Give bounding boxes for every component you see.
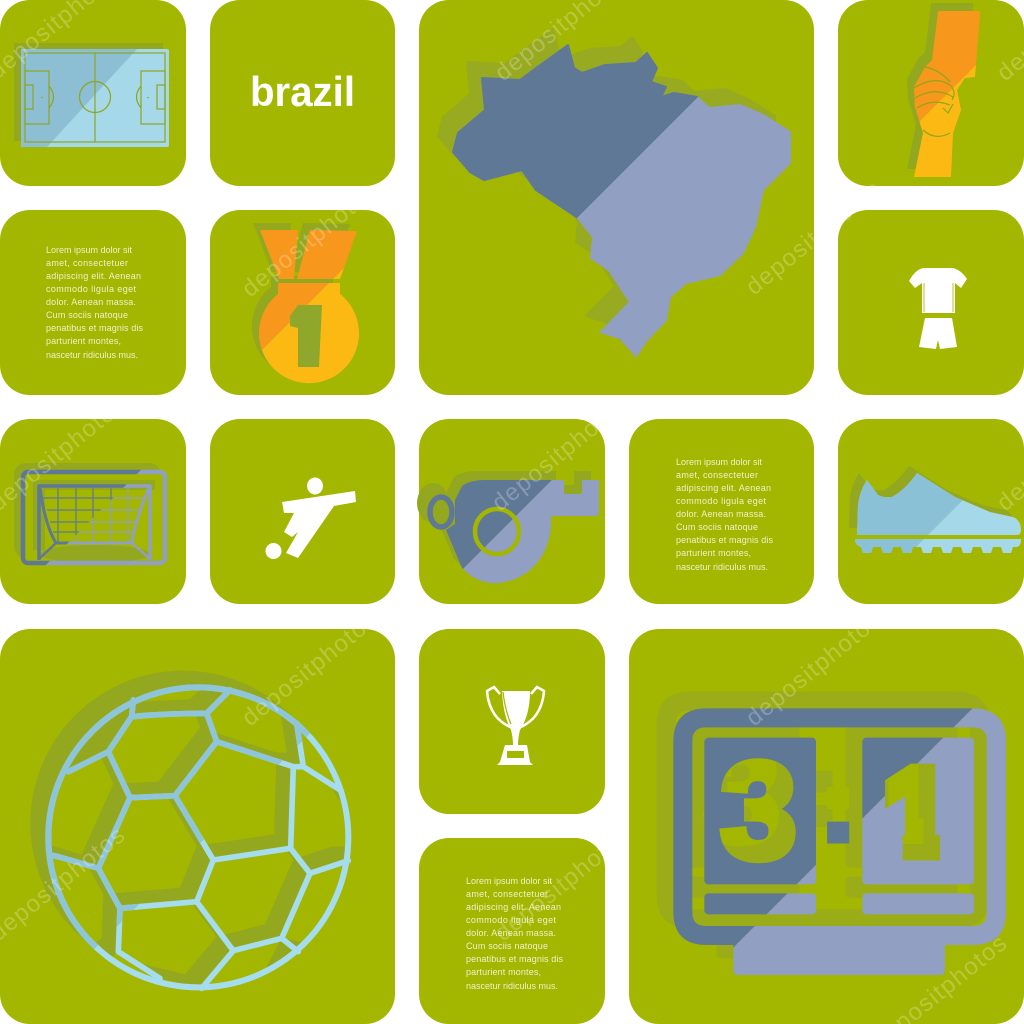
panel: trophy (419, 629, 605, 814)
text block: penatibus et magnis dis (46, 323, 144, 333)
text block: commodo ligula eget (676, 496, 766, 506)
icon: hand holding card (907, 3, 980, 177)
text block: Cum sociis natoque (676, 522, 758, 532)
text block: Lorem ipsum dolor sit (466, 876, 552, 886)
panel: boot (838, 419, 1024, 604)
text block: adipiscing elit. Aenean (46, 271, 141, 281)
panel: text block 2 (629, 419, 814, 604)
text block: amet, consectetuer (466, 889, 548, 899)
watermarks: depositphotos (490, 822, 635, 947)
panel: player (210, 419, 395, 604)
text block: Lorem ipsum dolor sit (46, 245, 132, 255)
icon: whistle (417, 471, 599, 583)
text block: commodo ligula eget (466, 915, 556, 925)
panel: goal (0, 419, 186, 604)
panel: ball (0, 629, 395, 1024)
text block: adipiscing elit. Aenean (466, 902, 561, 912)
watermarks: depositphotos (237, 178, 382, 303)
text block: parturient montes, (46, 336, 121, 346)
panel: kit (838, 210, 1024, 395)
text block (466, 876, 564, 991)
icon: footballer kicking ball (266, 478, 356, 559)
text block: amet, consectetuer (46, 258, 128, 268)
panel: referee card (838, 0, 1024, 186)
text block: nascetur ridiculus mus. (466, 981, 558, 991)
icon: goal (14, 463, 165, 563)
text block: dolor. Aenean massa. (466, 928, 556, 938)
icon: scoreboard 3:1 (657, 692, 1006, 975)
icon: trophy (487, 687, 544, 765)
icon: jersey and shorts (909, 268, 967, 349)
panel: brazil title (210, 0, 395, 186)
text block: parturient montes, (466, 967, 541, 977)
text block: penatibus et magnis dis (676, 535, 774, 545)
icon: scoreboard 3:1: : (806, 738, 837, 842)
watermarks: depositphotos (741, 176, 886, 301)
text block: adipiscing elit. Aenean (676, 483, 771, 493)
text block: nascetur ridiculus mus. (676, 562, 768, 572)
text block: Cum sociis natoque (466, 941, 548, 951)
icon: Brazil map (438, 29, 790, 356)
text block: dolor. Aenean massa. (676, 509, 766, 519)
text block: Lorem ipsum dolor sit (676, 457, 762, 467)
watermarks: depositphotos (487, 392, 632, 517)
panel: pitch (0, 0, 186, 186)
panel: medal (210, 210, 395, 395)
panel: text block 3 (419, 838, 605, 1024)
panel: scoreboard (629, 629, 1024, 1024)
text block: penatibus et magnis dis (466, 954, 564, 964)
text block: parturient montes, (676, 548, 751, 558)
text block (676, 457, 774, 572)
title: brazil (250, 68, 355, 115)
icon: football boot (849, 466, 1021, 553)
watermarks: depositphotos (741, 607, 886, 732)
panel: whistle (417, 419, 605, 604)
text block (46, 245, 144, 360)
text block: commodo ligula eget (46, 284, 136, 294)
text block: Cum sociis natoque (46, 310, 128, 320)
watermarks: depositphotos (237, 607, 382, 732)
panel: map of Brazil (419, 0, 814, 395)
text block: amet, consectetuer (676, 470, 758, 480)
text block: dolor. Aenean massa. (46, 297, 136, 307)
icon: scoreboard 3:1: : (823, 755, 854, 859)
icon: football pitch (14, 43, 169, 147)
icon: football (30, 670, 352, 992)
panel: text block 1 (0, 210, 186, 395)
text block: nascetur ridiculus mus. (46, 350, 138, 360)
icon: gold medal (252, 223, 359, 383)
